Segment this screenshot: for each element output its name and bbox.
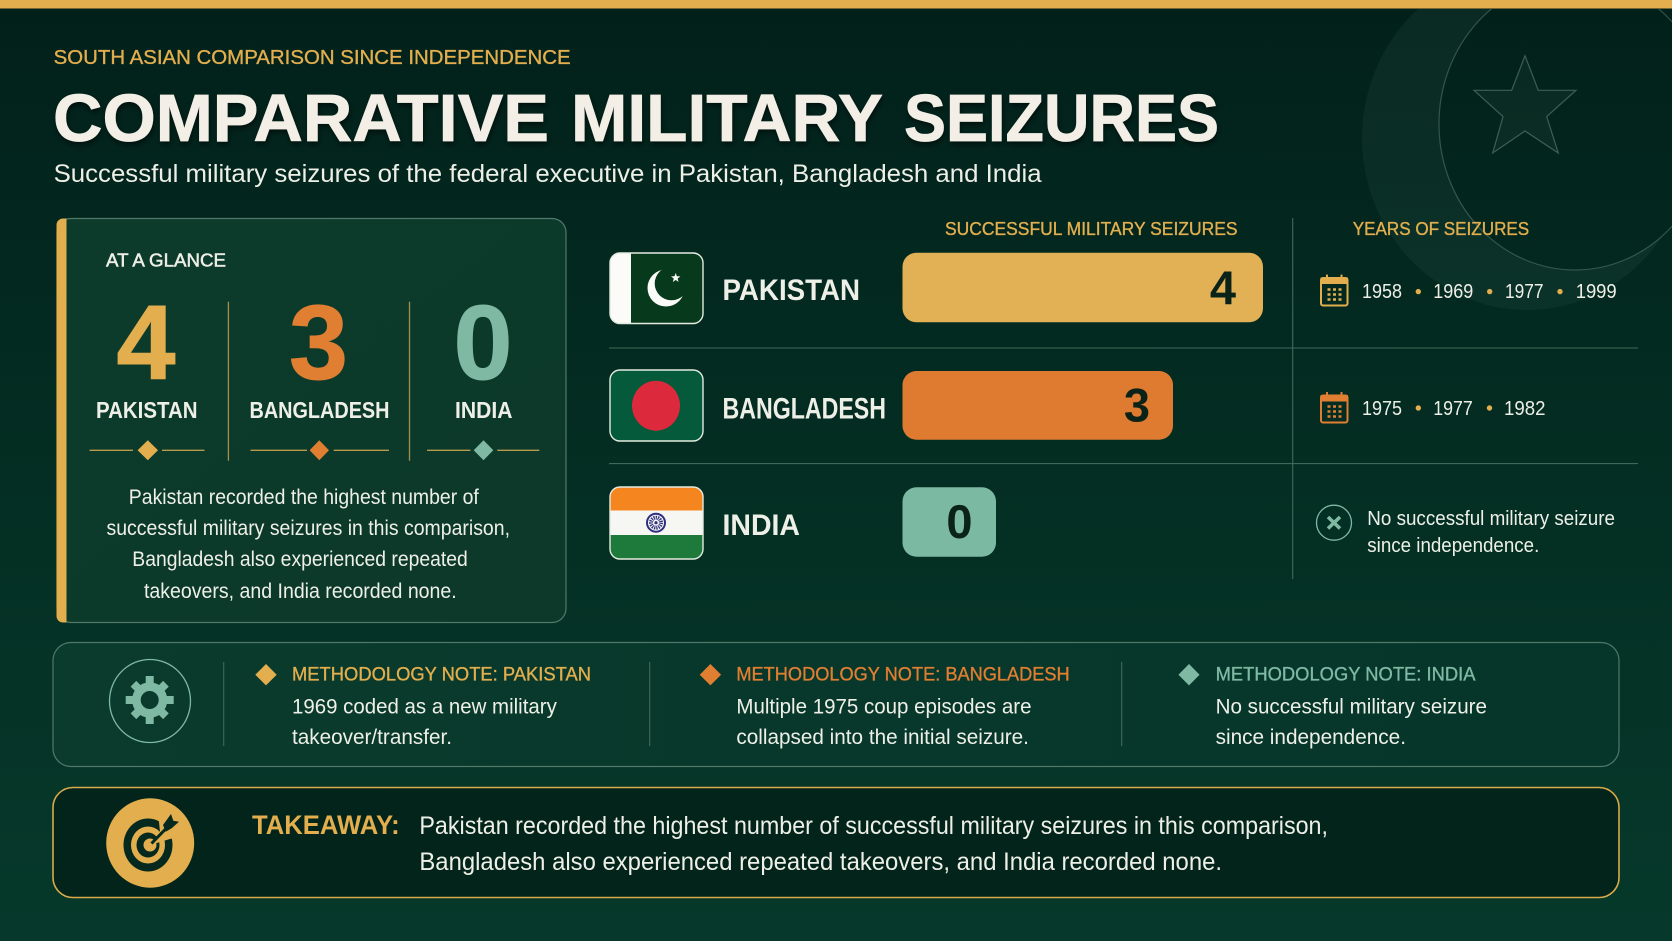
note: India: No successful military seizure bbox=[1216, 694, 1487, 718]
title bbox=[53, 81, 1219, 156]
stat: India bbox=[427, 284, 539, 460]
at a glance heading: AT A GLANCE bbox=[106, 250, 226, 270]
at a glance summary text: successful military seizures in this comparison, bbox=[106, 517, 510, 540]
note: Pakistan: takeover/transfer. bbox=[292, 725, 452, 749]
years: Pakistan: 1977 bbox=[1505, 280, 1544, 303]
bar: Pakistan value 4 bbox=[902, 253, 1263, 322]
stat: Pakistan bbox=[90, 284, 204, 460]
top accent bar bbox=[0, 0, 1672, 8]
note: India bbox=[1178, 664, 1487, 749]
stat: Bangladesh: BANGLADESH bbox=[250, 397, 390, 423]
decorative crescent and star watermark bbox=[1362, 0, 1672, 310]
bar: Bangladesh value 3: 3 bbox=[1124, 378, 1150, 431]
stat: Pakistan: PAKISTAN bbox=[96, 397, 198, 423]
stat: Bangladesh: 3 bbox=[289, 284, 348, 402]
title: SEIZURES bbox=[904, 81, 1219, 156]
years: Bangladesh: 1975 bbox=[1362, 397, 1402, 420]
flag: Bangladesh bbox=[610, 370, 703, 441]
subtitle: Successful military seizures of the federal executive in Pakistan, Bangladesh and India bbox=[54, 160, 1042, 188]
no seizure note: India: No successful military seizure bbox=[1367, 508, 1615, 530]
takeaway text: Bangladesh also experienced repeated takeovers, and India recorded none. bbox=[419, 848, 1222, 876]
note: Pakistan: METHODOLOGY NOTE: PAKISTAN bbox=[292, 664, 591, 686]
icon: gear bbox=[110, 660, 190, 742]
note: Bangladesh: collapsed into the initial seizure. bbox=[736, 725, 1029, 749]
takeaway text: Pakistan recorded the highest number of successful military seizures in this comparison, bbox=[419, 812, 1328, 840]
years: Pakistan: 1969 bbox=[1433, 280, 1473, 303]
at a glance summary text: takeovers, and India recorded none. bbox=[144, 580, 457, 603]
panel: methodology notes bbox=[53, 642, 1619, 766]
at a glance summary text: Bangladesh also experienced repeated bbox=[132, 548, 468, 571]
bar: India value 0 bbox=[902, 487, 996, 557]
bar: India value 0: 0 bbox=[946, 495, 973, 548]
stat: Pakistan: 4 bbox=[117, 284, 176, 402]
stat: Bangladesh bbox=[250, 284, 390, 460]
note: Pakistan: 1969 coded as a new military bbox=[292, 694, 557, 718]
years: Pakistan: 1999 bbox=[1576, 280, 1617, 303]
note: India: since independence. bbox=[1216, 725, 1406, 749]
years: Pakistan bbox=[1321, 275, 1617, 306]
icon: x in circle bbox=[1316, 505, 1352, 540]
at a glance summary text bbox=[106, 486, 510, 603]
years: Bangladesh: 1982 bbox=[1504, 397, 1546, 420]
no seizure note: India bbox=[1316, 505, 1615, 557]
note: Bangladesh: Multiple 1975 coup episodes are bbox=[736, 694, 1032, 718]
icon: target with arrow bbox=[106, 798, 194, 888]
panel: takeaway bbox=[53, 788, 1619, 898]
years: Bangladesh: 1977 bbox=[1433, 397, 1473, 420]
icon: calendar bbox=[1321, 392, 1348, 422]
country label: India: INDIA bbox=[722, 509, 800, 542]
stat: India: 0 bbox=[454, 284, 512, 402]
flag: India bbox=[610, 487, 703, 559]
note: Pakistan bbox=[255, 664, 591, 749]
column heading: years of seizures: YEARS OF SEIZURES bbox=[1353, 218, 1529, 239]
note: Bangladesh: METHODOLOGY NOTE: BANGLADESH bbox=[736, 664, 1070, 686]
country label: Pakistan: PAKISTAN bbox=[722, 274, 860, 307]
stat: India: INDIA bbox=[455, 397, 512, 423]
at a glance summary text: Pakistan recorded the highest number of bbox=[129, 486, 479, 509]
bar: Bangladesh value 3 bbox=[902, 371, 1173, 440]
title: COMPARATIVE bbox=[53, 81, 549, 156]
title: MILITARY bbox=[571, 81, 883, 156]
column heading: successful military seizures: SUCCESSFUL MILITARY SEIZURES bbox=[945, 218, 1238, 239]
years: Pakistan: 1958 bbox=[1362, 280, 1402, 303]
takeaway text bbox=[419, 812, 1328, 876]
takeaway label: TAKEAWAY: bbox=[252, 810, 400, 840]
note: Bangladesh bbox=[700, 664, 1070, 749]
flag: Pakistan bbox=[610, 253, 703, 324]
eyebrow heading: SOUTH ASIAN COMPARISON SINCE INDEPENDENCE bbox=[54, 47, 571, 69]
icon: calendar bbox=[1321, 275, 1348, 306]
bar: Pakistan value 4: 4 bbox=[1210, 261, 1236, 314]
years: Bangladesh bbox=[1321, 392, 1546, 422]
country label: Bangladesh: BANGLADESH bbox=[722, 392, 886, 425]
panel: at a glance bbox=[56, 218, 566, 622]
note: India: METHODOLOGY NOTE: INDIA bbox=[1216, 664, 1476, 686]
no seizure note: India: since independence. bbox=[1367, 535, 1539, 557]
